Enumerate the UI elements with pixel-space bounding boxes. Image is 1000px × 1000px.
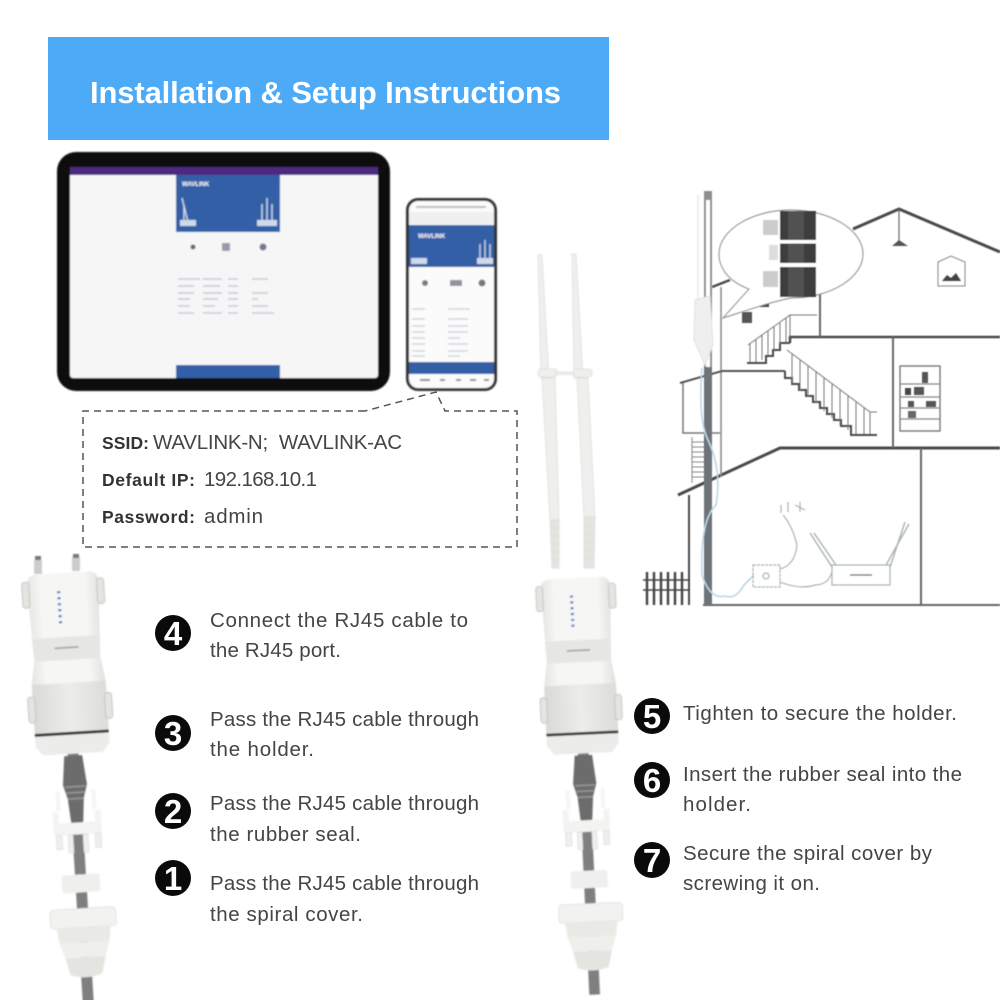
SSID line: SSID:	[102, 433, 149, 453]
speech bubble detail of pole mounting	[719, 210, 863, 318]
dashed callout with network defaults: 192.168.10.1	[204, 468, 317, 491]
step 7: Secure the spiral cover by	[683, 842, 933, 865]
left access point exploded view	[20, 554, 130, 1000]
step 2: the rubber seal.	[210, 823, 361, 846]
step 6: holder.	[683, 793, 751, 816]
step 2: Pass the RJ45 cable through	[210, 792, 479, 815]
step 5: Tighten to secure the holder.	[683, 702, 957, 725]
right access point with antennas	[534, 254, 635, 997]
dashed callout with network defaults: admin	[204, 505, 263, 528]
tablet showing the admin page	[57, 152, 390, 391]
step 7: 7	[643, 842, 661, 879]
step 1	[155, 860, 479, 926]
step 3: 3	[164, 715, 182, 752]
step 7: screwing it on.	[683, 872, 820, 895]
title: Installation & Setup Instructions	[90, 75, 561, 110]
tablet showing the admin page: WAVLINK	[182, 182, 210, 188]
fence	[643, 572, 690, 605]
pole with mounted access point	[694, 191, 754, 605]
step 2: 2	[164, 793, 182, 830]
step 1: 1	[164, 860, 182, 897]
antennas	[538, 254, 595, 568]
step 6	[634, 762, 962, 816]
shelf	[900, 366, 940, 431]
step 1: the spiral cover.	[210, 903, 363, 926]
phone showing the admin page: WAVLINK	[418, 234, 446, 240]
step 5	[634, 698, 957, 735]
step 1: Pass the RJ45 cable through	[210, 872, 479, 895]
step 3	[155, 708, 479, 761]
step 3: Pass the RJ45 cable through	[210, 708, 479, 731]
step 7	[634, 842, 933, 895]
step 5: 5	[643, 698, 661, 735]
step 6: 6	[643, 762, 661, 799]
default IP line: Default IP:	[102, 470, 195, 490]
phone showing the admin page	[406, 198, 497, 391]
step 4	[155, 609, 468, 662]
title banner	[48, 37, 609, 140]
left antenna connectors	[34, 554, 80, 574]
step 4: the RJ45 port.	[210, 639, 341, 662]
wall picture	[938, 256, 965, 286]
password line: Password:	[102, 507, 195, 527]
step 6: Insert the rubber seal into the	[683, 763, 962, 786]
step 2	[155, 792, 479, 846]
dashed callout with network defaults: WAVLINK-N; WAVLINK-AC	[153, 431, 402, 454]
dashed callout with network defaults	[83, 392, 517, 547]
indoor router, PoE box and cabling	[753, 502, 909, 587]
step 4: 4	[164, 615, 183, 652]
step 4: Connect the RJ45 cable to	[210, 609, 468, 632]
house installation diagram	[643, 209, 1000, 605]
step 3: the holder.	[210, 738, 314, 761]
